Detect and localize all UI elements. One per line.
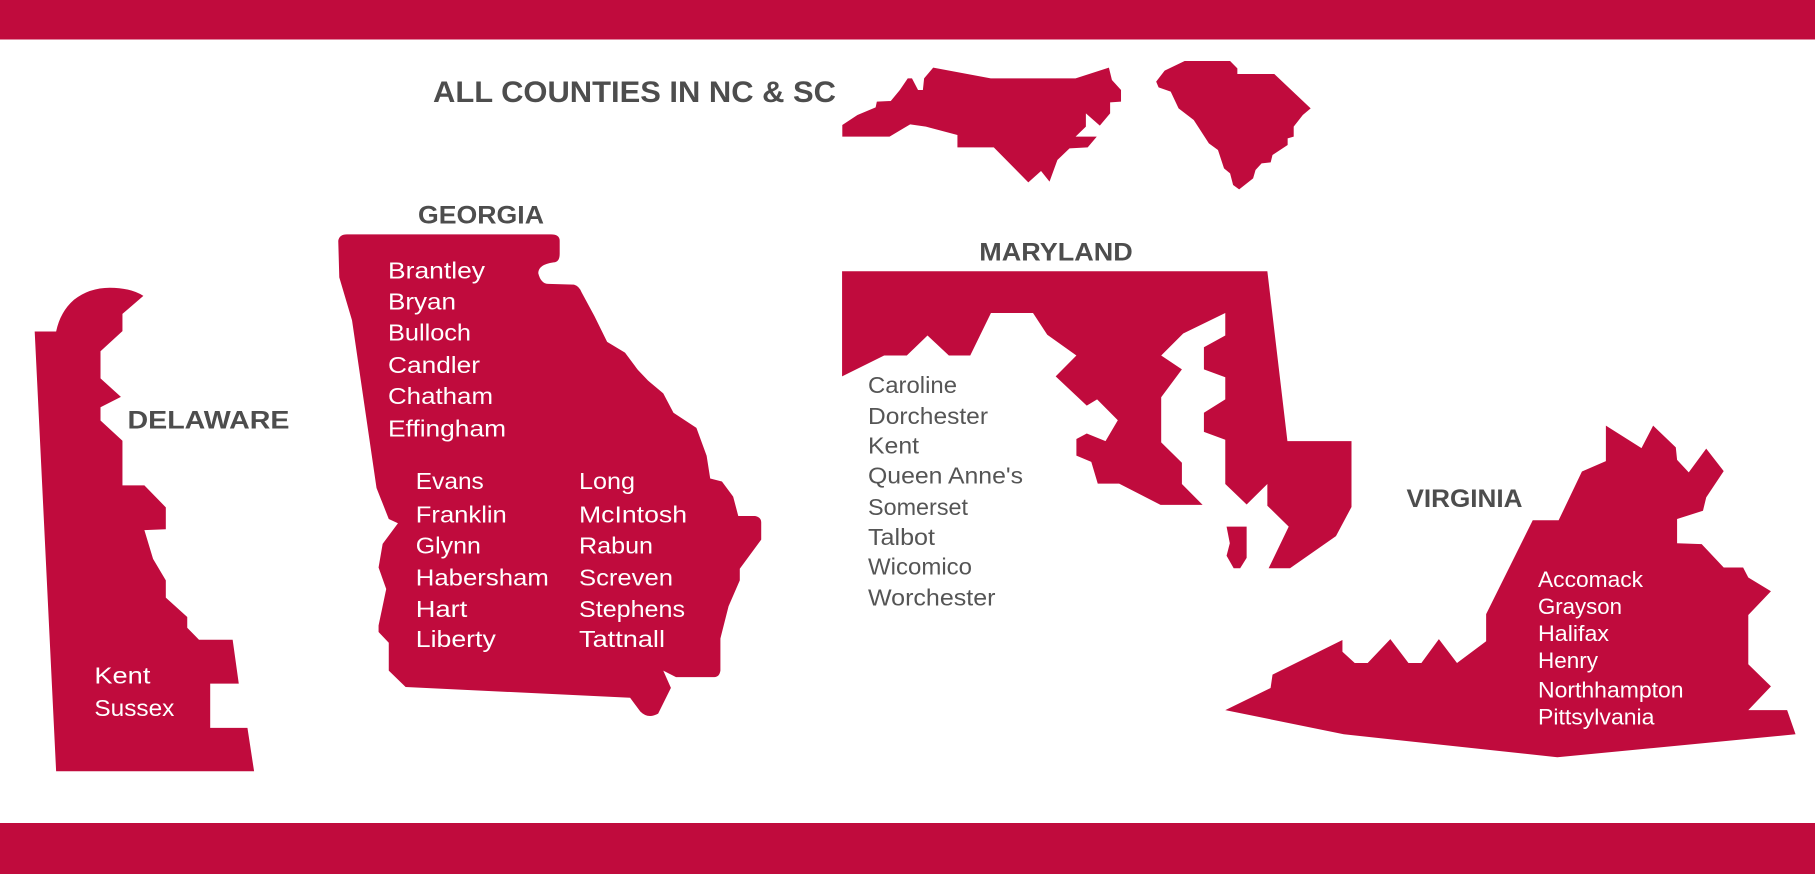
county list: Virginia	[1538, 567, 1684, 730]
heading: Georgia: GEORGIA	[418, 202, 544, 230]
panel: Maryland	[842, 238, 1351, 611]
county list: Delaware: Sussex	[94, 695, 175, 721]
county list: Georgia column one: Brantley	[388, 258, 485, 284]
heading: all counties in NC and SC: ALL COUNTIES IN NC & SC	[433, 76, 836, 109]
county list: Georgia column two: Hart	[416, 596, 468, 622]
map: Delaware	[35, 288, 254, 771]
heading: Virginia: VIRGINIA	[1406, 485, 1522, 513]
county list: Maryland: Talbot	[868, 524, 935, 550]
county list: Maryland: Dorchester	[868, 403, 988, 429]
county list: Georgia column two: Habersham	[416, 565, 549, 591]
panel: Virginia	[1225, 426, 1796, 757]
heading: Maryland: MARYLAND	[979, 238, 1133, 266]
county list: Maryland	[868, 372, 1023, 611]
county list: Georgia column one: Chatham	[388, 383, 493, 409]
heading: Delaware: DELAWARE	[128, 406, 290, 434]
county list: Virginia: Henry	[1538, 648, 1598, 673]
county list: Maryland: Wicomico	[868, 554, 972, 580]
map: South Carolina	[1156, 61, 1311, 189]
panel: Delaware	[35, 288, 289, 771]
panel: Georgia	[338, 202, 761, 716]
county list: Georgia column three: Rabun	[579, 532, 653, 558]
county list: Virginia: Northhampton	[1538, 678, 1684, 702]
county list: Maryland: Somerset	[868, 494, 968, 520]
bottom banner bar	[0, 823, 1815, 874]
county list: Georgia column three: Screven	[579, 565, 673, 591]
county list: Georgia column three: Tattnall	[579, 626, 665, 652]
county list: Maryland: Queen Anne's	[868, 462, 1023, 488]
top banner bar	[0, 0, 1815, 40]
county list: Delaware: Kent	[94, 663, 151, 689]
county list: Georgia column one	[388, 258, 506, 442]
county list: Georgia column two: Franklin	[416, 501, 507, 527]
county list: Georgia column two: Glynn	[416, 532, 481, 558]
county list: Delaware	[94, 663, 175, 721]
county list: Georgia column one: Candler	[388, 352, 480, 378]
county list: Georgia column two: Liberty	[416, 626, 496, 652]
county list: Maryland: Kent	[868, 432, 919, 458]
county list: Georgia column one: Effingham	[388, 416, 506, 442]
map: Virginia	[1225, 426, 1796, 757]
county list: Georgia column two	[416, 468, 549, 652]
county list: Georgia column one: Bulloch	[388, 320, 471, 346]
county list: Georgia column one: Bryan	[388, 289, 456, 315]
county list: Georgia column three	[579, 468, 687, 652]
map: Georgia	[338, 234, 761, 716]
county list: Georgia column two: Evans	[416, 468, 484, 494]
county list: Virginia: Accomack	[1538, 567, 1644, 592]
county list: Georgia column three: McIntosh	[579, 501, 687, 527]
county list: Georgia column three: Long	[579, 468, 635, 494]
panel: North and South Carolina	[433, 61, 1311, 189]
county list: Georgia column three: Stephens	[579, 596, 685, 622]
county list: Maryland: Caroline	[868, 372, 957, 398]
map: North Carolina	[842, 68, 1121, 182]
county list: Virginia: Pittsylvania	[1538, 705, 1655, 730]
county list: Virginia: Grayson	[1538, 594, 1622, 619]
county list: Virginia: Halifax	[1538, 621, 1609, 646]
map: Maryland	[842, 271, 1351, 568]
county list: Maryland: Worchester	[868, 585, 996, 611]
